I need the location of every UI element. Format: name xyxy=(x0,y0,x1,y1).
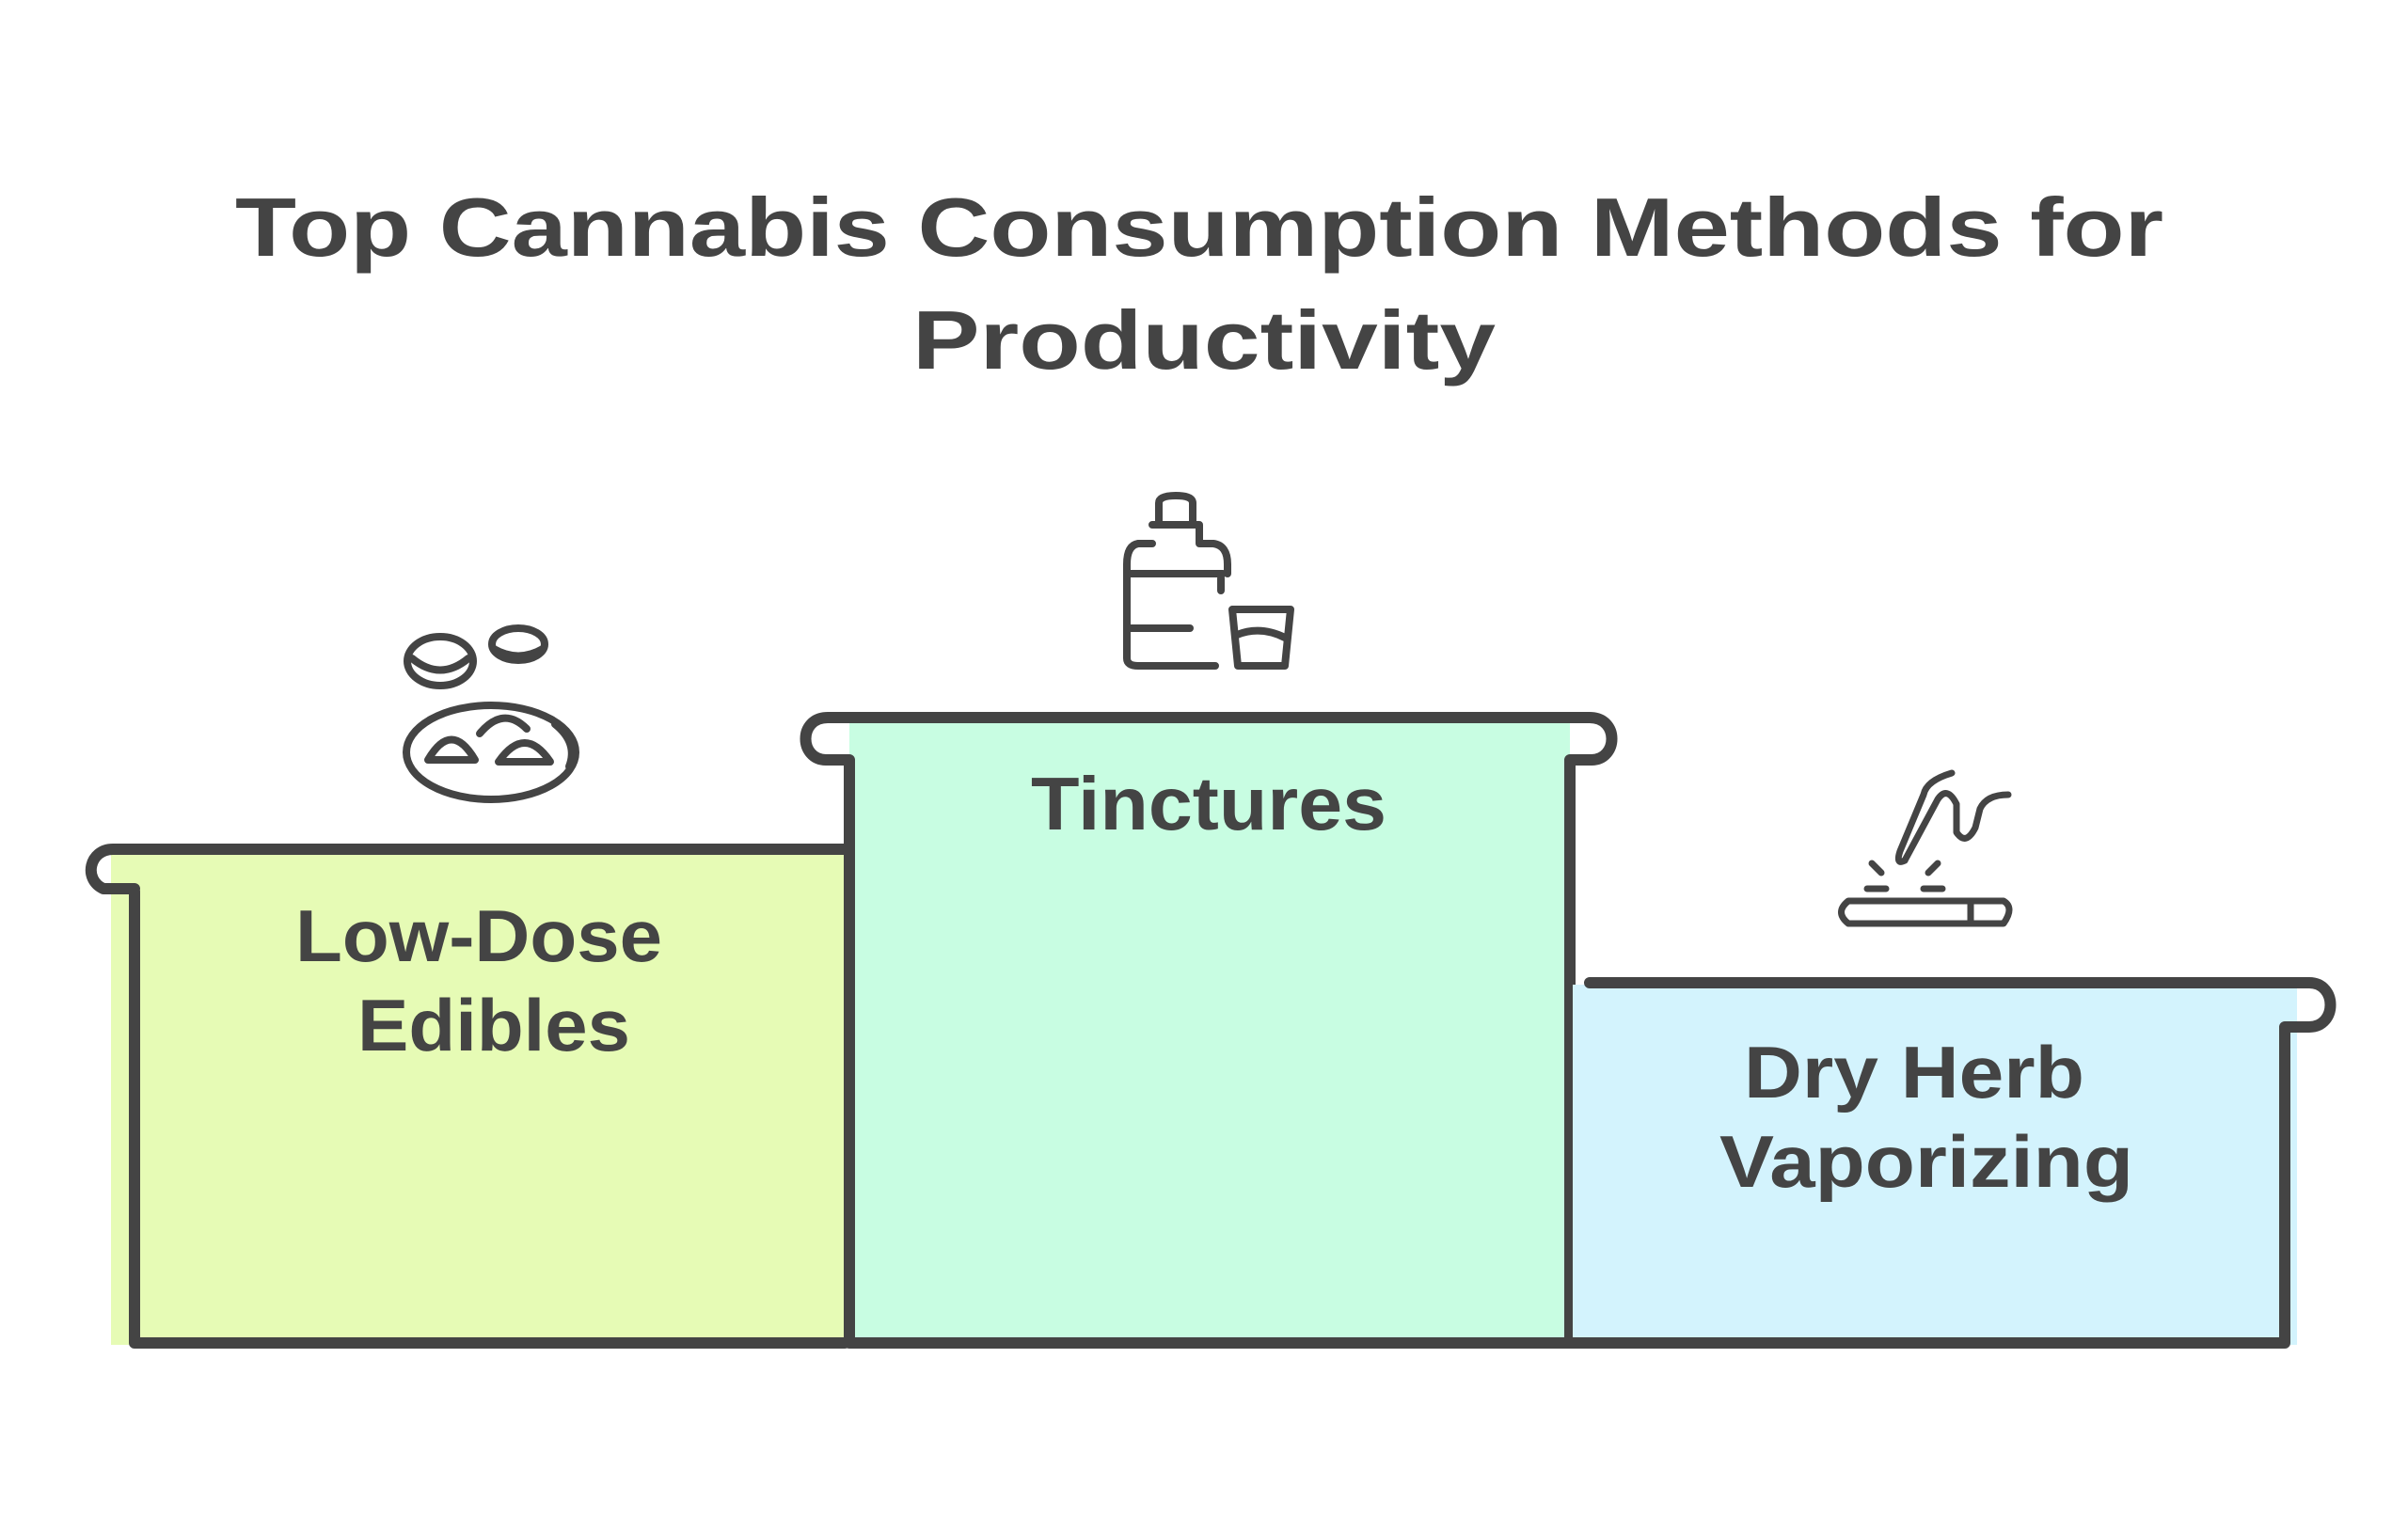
label: tinctures: Tinctures xyxy=(1031,762,1386,845)
label: low-dose edibles: Edibles xyxy=(357,984,630,1066)
title xyxy=(235,181,2163,387)
panel: low-dose edibles xyxy=(91,849,845,1345)
label: dry herb vaporizing: Dry Herb xyxy=(1744,1031,2084,1113)
icon: dry herb vaporizer xyxy=(1842,773,2009,924)
icon: tincture bottle and glass xyxy=(1127,496,1291,666)
label: dry herb vaporizing: Vaporizing xyxy=(1719,1120,2133,1203)
label: low-dose edibles: Low-Dose xyxy=(295,894,662,977)
label: low-dose edibles xyxy=(295,894,662,1066)
title: Top Cannabis Consumption Methods for xyxy=(235,181,2163,274)
icon: edibles xyxy=(406,628,576,799)
label: dry herb vaporizing xyxy=(1719,1031,2133,1203)
title: Productivity xyxy=(912,293,1496,387)
panel: tinctures xyxy=(805,718,1612,1345)
panel: dry herb vaporizing xyxy=(1570,983,2331,1345)
